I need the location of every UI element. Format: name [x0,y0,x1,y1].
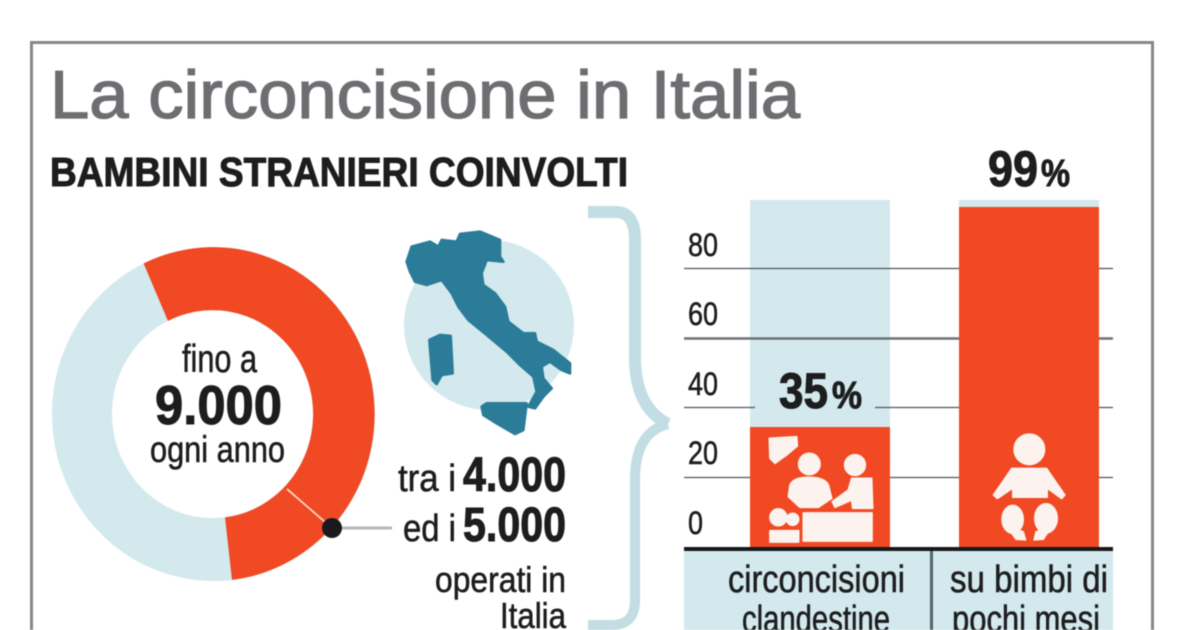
bar track: infants [959,200,1099,207]
callout text: operated in Italy: 4.000 [463,449,566,502]
brace [588,212,668,625]
donut chart [52,247,392,581]
grid lines [684,268,1113,478]
axis labels: 60 [688,296,718,332]
donut centre label: fino a [182,338,257,381]
icon: map of Italy [404,232,574,434]
axis labels: 80 [688,227,718,263]
title: La circoncisione in Italia [50,57,800,133]
icon: baby [993,434,1065,540]
map shapes [407,232,570,434]
value: 35% [779,363,862,419]
label: infants [950,559,1108,630]
axis labels: 0 [688,505,703,541]
value: 99% [988,141,1070,197]
donut centre label: ogni anno [150,429,285,470]
label: clandestine: circoncisioni [728,559,905,601]
donut centre label [150,338,285,470]
callout text: operated in Italy: 5.000 [463,499,566,552]
bar chart [684,141,1113,630]
label: clandestine [728,559,905,630]
axis labels: 40 [688,366,718,402]
map background circle [404,240,574,410]
axis labels: 20 [688,435,718,471]
bar labels band [684,551,1113,630]
value: 35%: % [832,375,862,417]
label: infants: su bimbi di [950,559,1108,601]
donut red segment [144,247,375,580]
callout leader [332,526,392,530]
donut track [52,247,375,581]
callout text: operated in Italy [398,449,567,630]
value: 99%: % [1041,153,1070,195]
chart baseline [684,547,1113,551]
axis labels [688,227,718,541]
segment divider [287,489,325,522]
bar: infants 99% [959,207,1099,547]
donut centre label: 9.000 [155,374,282,436]
value: 99%: 99 [988,141,1038,197]
icon: clandestine operation [769,437,873,542]
callout dot [322,518,342,538]
callout text: operated in Italy: tra i [398,458,456,500]
bar track: clandestine [750,200,890,427]
value: 35%: 35 [779,363,828,419]
subtitle: BAMBINI STRANIERI COINVOLTI [50,149,628,195]
callout text: operated in Italy: operati in [435,559,566,600]
bar: clandestine 35% [750,427,890,547]
callout text: operated in Italy: ed i [403,508,456,550]
